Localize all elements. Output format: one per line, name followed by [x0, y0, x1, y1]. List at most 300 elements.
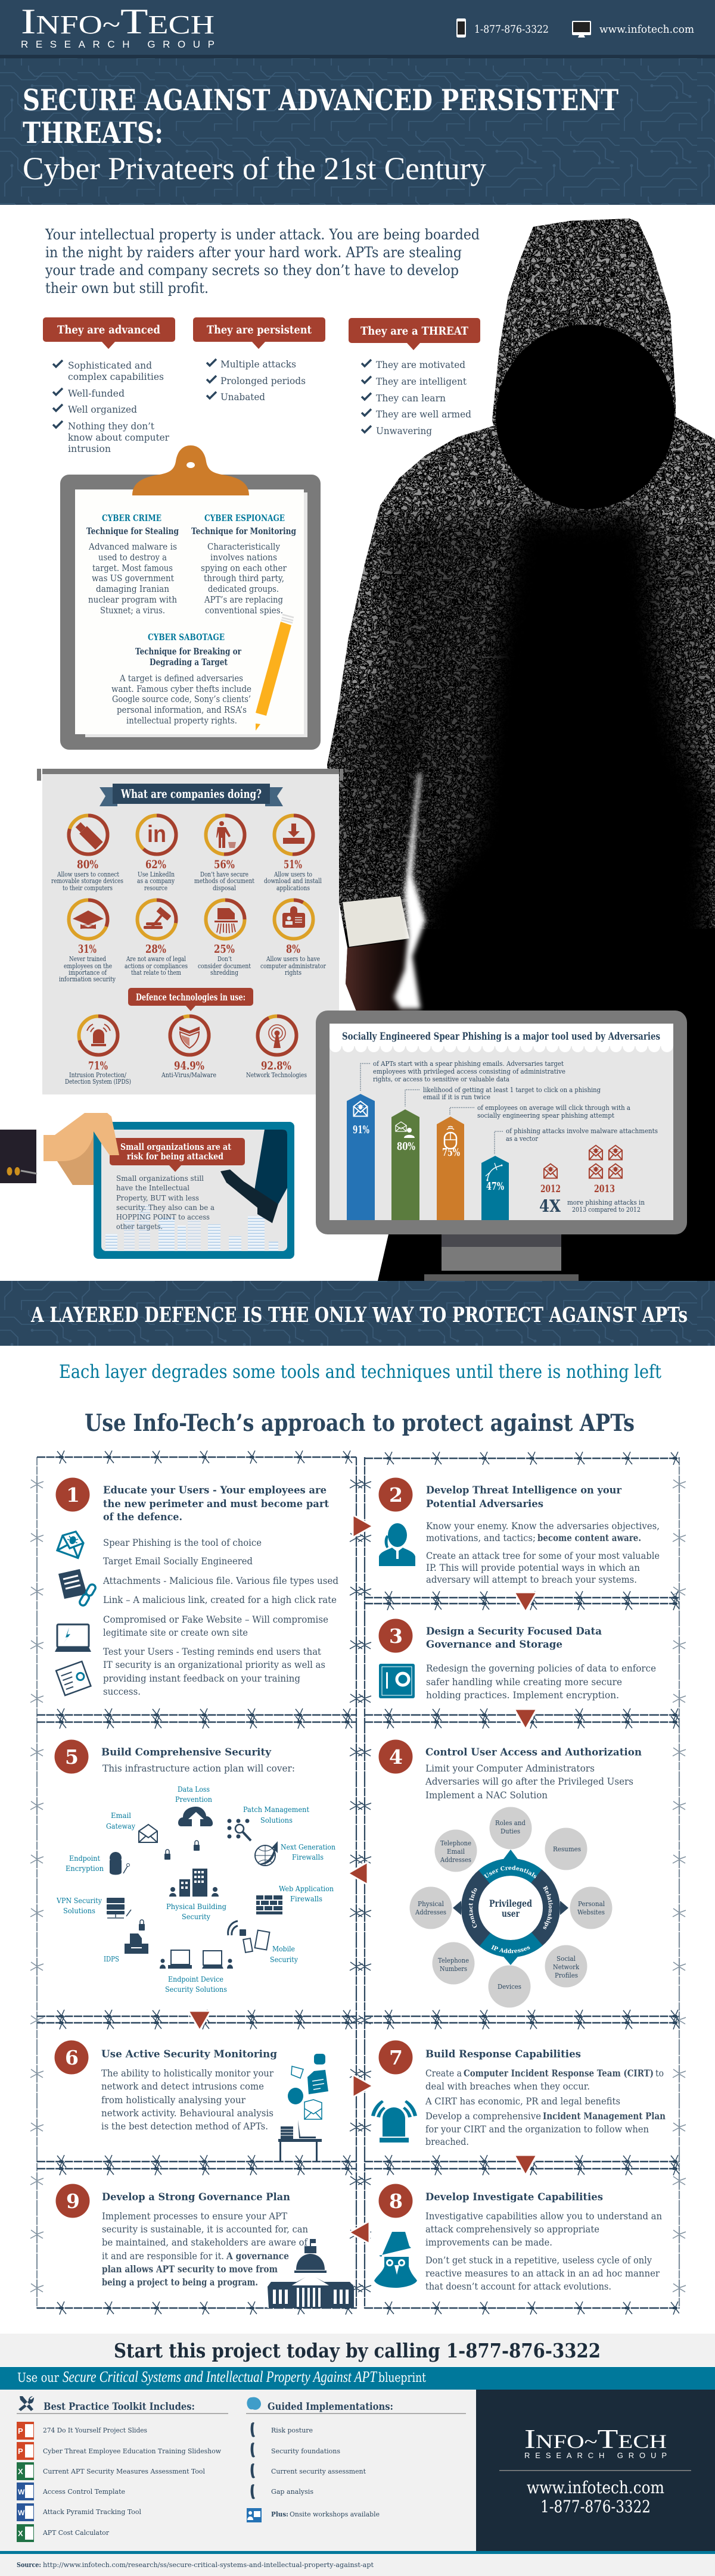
stat: 31%: Never trained: [69, 955, 106, 963]
security labels: Gateway: [106, 1822, 136, 1830]
step 3 heading: Design a Security Focused Data: [426, 1626, 602, 1638]
satellites: Duties: [500, 1827, 520, 1835]
security labels: Endpoint Device: [168, 1975, 223, 1984]
source line: [0, 2551, 715, 2576]
step 1: 1: [66, 1483, 80, 1507]
step 9 text: Implement processes to ensure your APT: [102, 2211, 288, 2222]
list: advanced: Well-funded: [68, 388, 125, 399]
step 2 heading: Develop Threat Intelligence on your: [426, 1485, 622, 1496]
column: cyber crime: Advanced malware is: [88, 542, 177, 552]
security labels: Data Loss: [178, 1785, 210, 1794]
callout: small organizations: Small organizations are at: [120, 1142, 231, 1152]
step 6: [55, 2040, 328, 2162]
guided list: Security foundations: [271, 2447, 340, 2455]
list: advanced: Nothing they don’t: [68, 420, 155, 432]
callout texts: socially engineering spear phishing attempt: [477, 1112, 615, 1119]
toolkit list: Current APT Security Measures Assessment Tool: [43, 2468, 205, 2475]
step 1 text: Compromised or Fake Website – Will compromise: [103, 1614, 328, 1625]
security labels: Firewalls: [292, 1853, 324, 1861]
column: cyber espionage: through third party,: [204, 574, 284, 584]
icon: capitol building: [268, 2239, 354, 2308]
step 8: [374, 2184, 662, 2292]
step 4 text: Adversaries will go after the Privileged Users: [425, 1776, 633, 1787]
stat: 31%: employees on the: [64, 962, 112, 970]
stat: 28%: that relate to them: [131, 969, 181, 977]
step 7 text: deal with breaches when they occur.: [425, 2081, 590, 2092]
guided list: Gap analysis: [271, 2488, 313, 2496]
stat: 62%: in: [147, 821, 166, 847]
column: cyber crime: Stuxnet; a virus.: [100, 606, 165, 616]
step 9 heading: Develop a Strong Governance Plan: [102, 2191, 290, 2203]
column: cyber espionage: [191, 513, 296, 616]
satellites: Physical: [418, 1900, 444, 1908]
arrows between steps: [188, 1515, 537, 2244]
icon: certificate: [56, 1661, 91, 1695]
column: cyber crime: was US government: [92, 574, 174, 584]
step 2 heading: [426, 1485, 622, 1510]
callout texts: of employees on average will click through with a: [477, 1104, 630, 1112]
step 6 text: from holistically analysing your: [101, 2095, 246, 2106]
list: advanced: [53, 360, 169, 454]
stat: 8%: 8%: [286, 943, 300, 956]
satellites: Social: [557, 1955, 576, 1963]
diagram: privileged user wheel: User Credentials: [484, 1866, 537, 1878]
stat: 51%: Allow users to: [273, 871, 312, 878]
callout texts: rights, or access to sensitive or valuable data: [373, 1075, 509, 1083]
step 5: [55, 1740, 335, 1994]
step 7: 7: [389, 2046, 403, 2069]
icon: safe: [379, 1664, 415, 1698]
security labels: Security: [182, 1912, 211, 1921]
step 6: 6: [65, 2046, 79, 2069]
step 4 text: [425, 1763, 633, 1801]
callout: they are a threat: They are a THREAT: [360, 325, 468, 338]
icon: desk with floating documents: [278, 2054, 328, 2162]
stat: 94.9%: Anti-Virus/Malware: [161, 1071, 216, 1079]
source line: http://www.infotech.com/research/ss/secure-critical-systems-and-intellectual-property-against-apt: [43, 2561, 374, 2569]
step 1 text: Test your Users - Testing reminds end users that: [103, 1646, 322, 1657]
ribbon heading: What are companies doing?: [120, 787, 262, 801]
column: cyber espionage: conventional spies.: [205, 606, 283, 616]
city skyline: [105, 1204, 278, 1251]
heading: approach: Use Info-Tech’s approach to protect against APTs: [85, 1409, 635, 1437]
column: cyber sabotage: Technique for Breaking or: [135, 647, 241, 657]
footer logo: RESEARCH GROUP: [524, 2451, 667, 2460]
title: THREATS:: [23, 116, 163, 150]
step 3 heading: Governance and Storage: [426, 1639, 562, 1651]
step 1 text: [102, 1538, 338, 1697]
satellites: Addresses: [440, 1856, 471, 1864]
security labels: Prevention: [175, 1795, 212, 1804]
security labels: Firewalls: [290, 1894, 322, 1903]
column: cyber crime: damaging Iranian: [96, 585, 169, 594]
satellites: Profiles: [555, 1972, 578, 1979]
step 1 text: Target Email Socially Engineered: [103, 1556, 253, 1567]
stat: 51%: applications: [276, 884, 310, 892]
security labels: Encryption: [66, 1864, 104, 1873]
step 2 text: become content aware.: [537, 1532, 641, 1543]
list: threat: They are well armed: [376, 408, 471, 420]
stat: 31%: 31%: [78, 943, 97, 956]
column: cyber crime: used to destroy a: [98, 553, 167, 563]
callout texts: as a vector: [506, 1135, 539, 1143]
step 7 text: Computer Incident Response Team (CIRT): [464, 2067, 654, 2079]
panel: resources: [0, 2390, 476, 2551]
security labels: Security: [270, 1955, 299, 1964]
step 1 text: legitimate site or create own site: [103, 1627, 248, 1638]
step 4 heading: Control User Access and Authorization: [425, 1747, 642, 1758]
list: advanced: complex capabilities: [68, 371, 164, 382]
footer contact: [527, 2478, 664, 2516]
step 9 text: [102, 2211, 308, 2288]
security labels: Email: [111, 1811, 131, 1820]
callout texts: [373, 1060, 658, 1143]
list: threat: [362, 359, 471, 436]
blueprint bar: Secure Critical Systems and Intellectual Property Against APT: [63, 2368, 377, 2385]
step 3 text: holding practices. Implement encryption.: [426, 1690, 619, 1701]
stat: 25%: 25%: [214, 943, 235, 956]
security labels: Endpoint: [69, 1854, 100, 1863]
column: cyber sabotage: intellectual property rights.: [126, 716, 237, 726]
icon: monitor: [572, 21, 591, 38]
stat: 92.8%: [246, 1016, 307, 1079]
callout: they are persistent: They are persistent: [207, 323, 312, 336]
guided list: [247, 2423, 380, 2522]
list: advanced: Well organized: [68, 404, 137, 415]
section banner: layered defence: [0, 1281, 715, 1346]
step 7 text: Develop a comprehensive: [425, 2111, 541, 2122]
stat: 62%: as a company: [137, 877, 175, 885]
toolkit heading: [17, 2396, 228, 2414]
list: advanced: know about computer: [68, 432, 169, 443]
bar: 91%: 91%: [353, 1124, 369, 1136]
step 3 heading: [426, 1626, 602, 1651]
toolkit list: Access Control Template: [42, 2488, 125, 2496]
guided list: Onsite workshops available: [290, 2510, 380, 2518]
stat: 51%: 51%: [284, 859, 302, 871]
panel: what are companies doing: [37, 769, 343, 1094]
4X stat: [539, 1196, 645, 1216]
step 1 heading: [103, 1485, 329, 1523]
footer contact: www.infotech.com: [527, 2478, 664, 2497]
stat: 56%: [194, 816, 254, 892]
step 9 text: it and are responsible for it.: [102, 2251, 224, 2262]
icon: pencil: [256, 615, 294, 731]
bar: 80%: 80%: [397, 1140, 415, 1153]
icon: attachment: [58, 1569, 97, 1607]
stat: 94.9%: 94.9%: [174, 1060, 204, 1072]
step 6 text: network activity. Behavioural analysis: [101, 2108, 273, 2119]
title banner: [0, 58, 715, 205]
step 6 text: is the best detection method of APTs.: [101, 2121, 268, 2132]
column: cyber espionage: dedicated groups.: [208, 585, 279, 594]
column: cyber sabotage: Degrading a Target: [150, 657, 228, 668]
step 2 text: motivations, and tactics;: [426, 1533, 536, 1543]
security labels: [56, 1785, 335, 1994]
satellites: Personal: [578, 1900, 605, 1908]
stat: 8%: Allow users to have: [266, 955, 320, 963]
red envelopes 2012 vs 2013: 2012: [540, 1183, 561, 1195]
security labels: Mobile: [272, 1944, 295, 1953]
column: cyber espionage: APT’s are replacing: [204, 595, 283, 605]
hooded figure: [322, 214, 715, 1286]
step 2 text: adversary will attempt to breach your systems.: [426, 1574, 637, 1585]
callout: they are advanced: [43, 317, 175, 349]
satellites: Telephone: [438, 1957, 469, 1964]
stat: 31%: importance of: [69, 969, 107, 977]
column: cyber crime: CYBER CRIME: [102, 513, 161, 523]
website: www.infotech.com: [599, 23, 694, 36]
step 6 text: network and detect intrusions come: [101, 2081, 264, 2092]
list: threat: They can learn: [376, 392, 446, 404]
step 4 text: Implement a NAC Solution: [425, 1790, 548, 1801]
column: cyber espionage: Characteristically: [207, 542, 281, 552]
call to action: [0, 2334, 715, 2366]
panel: small organizations tablet: [94, 1122, 294, 1259]
stat: 62%: Use LinkedIn: [138, 871, 175, 878]
call to action: Start this project today by calling 1-877-876-3322: [114, 2339, 601, 2362]
ribbon heading: [100, 784, 283, 806]
column: cyber crime: Technique for Stealing: [86, 526, 179, 537]
stat: 8%: [260, 900, 327, 977]
small organizations text: other targets.: [116, 1222, 163, 1231]
column: cyber espionage: involves nations: [210, 553, 277, 563]
toolkit list: W: [18, 2509, 25, 2517]
stat: 56%: 56%: [214, 859, 235, 871]
security labels: Security Solutions: [165, 1985, 227, 1994]
panel: contact: [476, 2390, 715, 2551]
step 3: [379, 1618, 656, 1701]
bar: 75%: 75%: [442, 1146, 460, 1159]
step 1 text: Link – A malicious link, created for a high click rate: [103, 1595, 337, 1605]
barbed wire frames: [30, 1450, 686, 2315]
step 8 text: improvements can be made.: [425, 2237, 552, 2248]
security labels: Solutions: [63, 1906, 95, 1915]
4X stat: more phishing attacks in: [567, 1198, 645, 1206]
list: persistent: [207, 358, 306, 403]
step 8 text: Don’t get stuck in a repetitive, useless cycle of only: [425, 2255, 652, 2266]
step 7 text: to: [655, 2068, 664, 2079]
step 7 text: Incident Management Plan: [543, 2110, 666, 2122]
step 6 heading: Use Active Security Monitoring: [101, 2048, 277, 2060]
step 4: 4: [389, 1745, 403, 1769]
guided list: Plus:: [271, 2510, 288, 2518]
security labels: Web Application: [279, 1884, 334, 1893]
header bar: [0, 0, 715, 58]
satellites: [410, 1807, 613, 2008]
footer logo: INFO ~TECH: [524, 2424, 667, 2454]
source line: Source:: [17, 2561, 41, 2569]
list: persistent: Unabated: [220, 391, 265, 403]
callout texts: of phishing attacks involve malware attachments: [506, 1127, 658, 1135]
red envelopes 2012 vs 2013: [540, 1145, 622, 1195]
column: cyber crime: nuclear program with: [88, 595, 177, 605]
guided list: Current security assessment: [271, 2468, 366, 2475]
stat: 71%: [65, 1016, 131, 1086]
callout texts: likelihood of getting at least 1 target to click on a phishing: [423, 1086, 601, 1094]
small organizations text: [116, 1174, 214, 1231]
column: cyber sabotage: personal information, and RSA’s: [117, 706, 247, 715]
step 8 heading: Develop Investigate Capabilities: [425, 2191, 603, 2203]
step 7 text: Create a: [425, 2068, 462, 2079]
logo: RESEARCH GROUP: [21, 39, 214, 50]
diagram: privileged user wheel: Privileged: [489, 1898, 532, 1909]
intro paragraph: Your intellectual property is under attack. You are being boarded: [45, 226, 480, 243]
bar: 91%: [347, 1094, 375, 1220]
step 4 text: Limit your Computer Administrators: [425, 1763, 595, 1774]
step 4: [379, 1740, 642, 2008]
intro paragraph: their own but still profit.: [45, 280, 209, 297]
diagram: privileged user wheel: Contact Info: [468, 1888, 477, 1928]
step 9 text: plan allows APT security to move from: [102, 2263, 278, 2275]
monitor stand: [424, 1234, 579, 1281]
stat: 80%: Allow users to connect: [57, 871, 119, 878]
step 2 text: IP. This will provide potential ways in which an: [426, 1563, 640, 1573]
callout: defence technologies: Defence technologies in use:: [136, 991, 245, 1003]
step 3 text: [426, 1663, 656, 1701]
step 8 text: Investigative capabilities allow you to understand an: [425, 2211, 662, 2222]
toolkit heading: Best Practice Toolkit Includes:: [43, 2401, 195, 2413]
step 8 text: reactive measures to an attack in an ad hoc manner: [425, 2268, 660, 2279]
list: advanced: Sophisticated and: [68, 360, 152, 371]
callout: defence technologies: [128, 988, 253, 1011]
step 8 text: [425, 2211, 662, 2292]
toolkit list: [17, 2422, 222, 2542]
step 2: [379, 1478, 660, 1585]
step 1 heading: of the defence.: [103, 1511, 182, 1523]
step 5 heading: Build Comprehensive Security: [101, 1747, 272, 1758]
security labels: Physical Building: [166, 1902, 226, 1911]
step 1 heading: Educate your Users - Your employees are: [103, 1485, 327, 1496]
blueprint bar: Use our: [17, 2371, 60, 2385]
toolkit list: 274 Do It Yourself Project Slides: [43, 2427, 147, 2434]
step 6 text: [101, 2068, 274, 2132]
icon: hand holding tablet: [0, 1113, 119, 1185]
callout: small organizations: [110, 1138, 245, 1172]
column: cyber sabotage: Google source code, Sony’s clients’: [112, 695, 251, 704]
icon: detective: [374, 2232, 417, 2288]
list: advanced: intrusion: [68, 443, 111, 454]
toolkit list: P: [18, 2427, 23, 2435]
intro paragraph: in the night by raiders after your hard work. APTs are stealing: [45, 244, 462, 261]
small organizations text: have the Intellectual: [116, 1184, 189, 1192]
satellites: Network: [553, 1963, 579, 1971]
step 8 text: attack comprehensively so appropriate: [425, 2224, 599, 2235]
4X stat: 2013 compared to 2012: [572, 1205, 641, 1214]
stat: 51%: [264, 816, 322, 892]
gap between arm and body: [394, 773, 425, 1009]
satellites: Websites: [577, 1908, 605, 1916]
satellites: Numbers: [440, 1965, 467, 1973]
stat: 25%: Don’t: [217, 955, 232, 963]
column: cyber crime: [86, 513, 179, 616]
stat: 92.8%: Network Technologies: [246, 1071, 307, 1079]
stat: 80%: to their computers: [63, 884, 113, 892]
step 7 text: A CIRT has economic, PR and legal benefits: [425, 2096, 620, 2107]
toolkit list: X: [18, 2529, 23, 2538]
toolkit list: X: [18, 2467, 23, 2476]
blueprint bar: [0, 2367, 715, 2390]
list: threat: Unwavering: [376, 425, 432, 436]
step 8: 8: [389, 2190, 403, 2213]
step 7 text: [425, 2067, 666, 2147]
stat: 80%: 80%: [77, 859, 98, 871]
intro paragraph: [45, 226, 480, 297]
icon: agent on phone: [379, 1523, 415, 1566]
security labels: IDPS: [104, 1954, 119, 1963]
stat: 56%: methods of document: [194, 877, 254, 885]
small organizations text: HOPPING POINT to access: [116, 1213, 210, 1221]
stat: 25%: [198, 900, 251, 977]
phone number: 1-877-876-3322: [474, 23, 549, 36]
callout texts: employees with privileged access consisting of administrative: [373, 1068, 565, 1075]
step 7 text: for your CIRT and the organization to follow when: [425, 2124, 649, 2135]
bar: 75%: [437, 1117, 464, 1220]
step 9 text: A governance: [226, 2250, 289, 2262]
guided heading: [246, 2397, 466, 2414]
column: cyber sabotage: [111, 632, 251, 726]
callout: small organizations: risk for being attacked: [127, 1151, 223, 1162]
step 1 text: success.: [103, 1686, 141, 1697]
bar: 47%: [481, 1156, 509, 1220]
column: cyber sabotage: want. Famous cyber thefts include: [111, 685, 251, 694]
panel: spear phishing monitor: [316, 1011, 687, 1281]
step 3: 3: [389, 1624, 403, 1648]
step 2 text: [426, 1521, 660, 1585]
title: [23, 83, 618, 150]
satellites: Addresses: [415, 1908, 446, 1916]
column: cyber sabotage: A target is defined adversaries: [119, 674, 243, 684]
satellites: Roles and: [495, 1819, 526, 1827]
stat: 62%: [137, 816, 176, 892]
step 1 heading: the new perimeter and must become part: [103, 1498, 329, 1510]
step 2 heading: Potential Adversaries: [426, 1498, 543, 1510]
stat: 28%: 28%: [145, 943, 166, 956]
callout texts: of APTs start with a spear phishing emails. Adversaries target: [373, 1060, 564, 1068]
stat: 71%: Intrusion Protection/: [69, 1071, 126, 1079]
step 2: 2: [389, 1483, 403, 1507]
step 5: 5: [65, 1745, 79, 1769]
stat: 8%: rights: [285, 969, 301, 977]
subtitle: Cyber Privateers of the 21st Century: [23, 151, 486, 186]
logo: INFO ~TECH: [21, 2, 214, 41]
diagram: privileged user wheel: [410, 1807, 613, 2008]
callout: they are a threat: [349, 318, 480, 350]
small organizations text: Property, BUT with less: [116, 1194, 199, 1202]
column: cyber espionage: Technique for Monitoring: [191, 526, 296, 537]
satellites: Resumes: [553, 1845, 581, 1853]
guided list: Risk posture: [271, 2427, 313, 2434]
stat: 28%: actions or compliances: [125, 962, 188, 970]
toolkit list: Cyber Threat Employee Education Training Slideshow: [43, 2447, 222, 2455]
dotted leaders: [360, 1064, 503, 1154]
toolkit list: Attack Pyramid Tracking Tool: [42, 2508, 141, 2516]
security labels: Solutions: [260, 1816, 293, 1825]
callout: they are advanced: They are advanced: [57, 323, 160, 336]
stat: 31%: [59, 900, 116, 983]
intro paragraph: your trade and company secrets so they don’t have to develop: [45, 262, 459, 279]
stat: 80%: removable storage devices: [51, 877, 123, 885]
stat: 56%: Don’t have secure: [200, 871, 248, 878]
step 1: [55, 1478, 338, 1697]
diagram: privileged user wheel: user: [502, 1908, 520, 1919]
diagram: privileged user wheel: IP Addresses: [491, 1945, 530, 1953]
bar: 80%: [391, 1109, 419, 1220]
stat: 8%: computer administrator: [260, 962, 327, 970]
stat: 56%: disposal: [213, 884, 236, 892]
toolkit list: W: [18, 2488, 25, 2496]
step 9 text: being a project to being a program.: [102, 2276, 258, 2288]
